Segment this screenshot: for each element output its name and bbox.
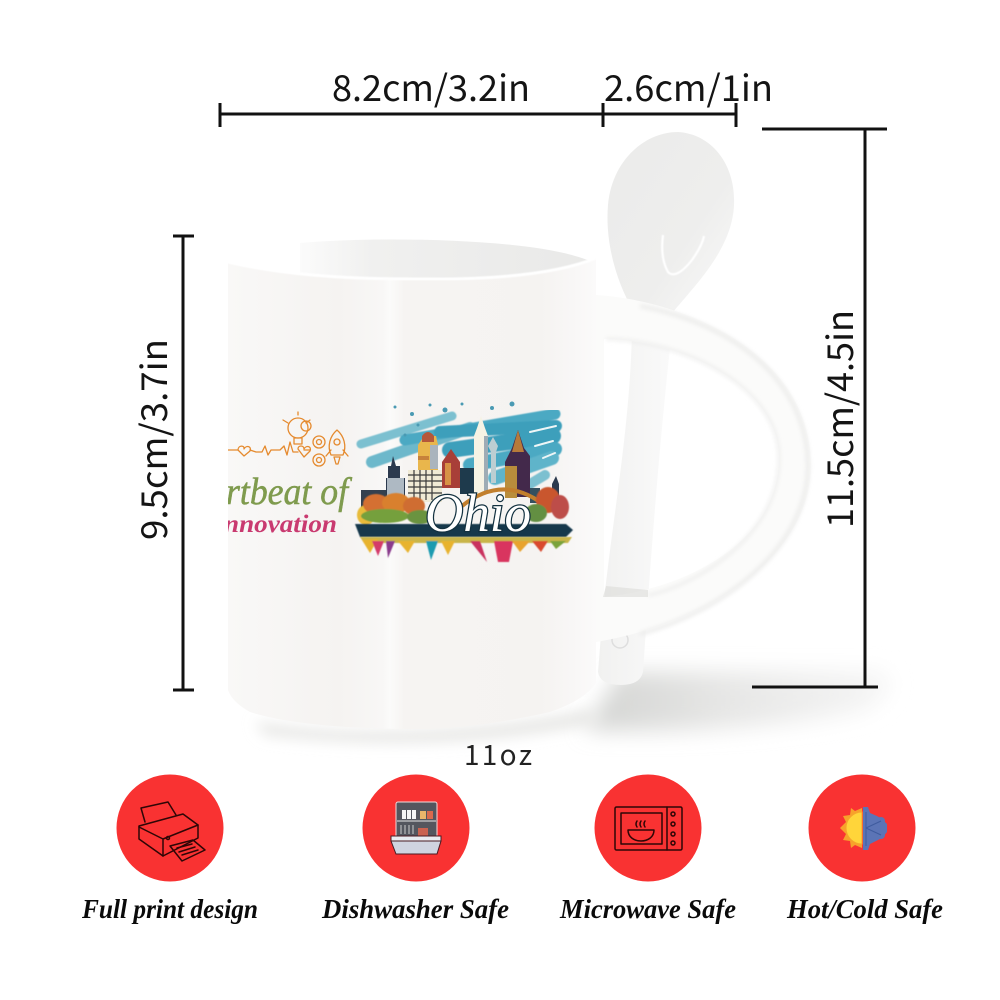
handle outer edge shade: [640, 306, 808, 634]
bridge arch: [462, 489, 548, 508]
handle inner edge shade: [606, 339, 779, 595]
capacity label: 11oz: [464, 734, 532, 774]
spoon highlight: [662, 235, 704, 274]
rim highlight: [228, 258, 596, 279]
dimension: handle width: 2.6cm/1in: [604, 60, 773, 112]
label: Full print design: [81, 894, 258, 924]
dimension: mug width: [220, 60, 603, 127]
feature: hot and cold: [786, 774, 943, 924]
feature: microwave: [559, 774, 736, 924]
dimension: total height: 11.5cm/4.5in: [812, 310, 864, 528]
mug handle: [596, 295, 811, 642]
white paint flecks: [530, 426, 556, 458]
spoon: [598, 132, 734, 685]
label: Microwave Safe: [559, 894, 736, 924]
heartbeat line and icons: [228, 412, 348, 466]
spoon stem: [598, 330, 672, 685]
mug shadow: [255, 672, 889, 743]
icon: printer: [139, 802, 205, 861]
label: Dishwasher Safe: [321, 894, 509, 924]
handle band: [596, 295, 811, 642]
feature: full print: [81, 774, 258, 924]
spoon hole: [612, 632, 628, 648]
Ohio lettering: Ohio: [425, 483, 531, 543]
red circle: [594, 774, 702, 882]
icon: microwave: [615, 807, 682, 850]
splatter: [394, 402, 514, 436]
red circle: [362, 774, 470, 882]
slogan line 2: nnovation: [224, 511, 337, 538]
red circle: [116, 774, 224, 882]
trees: [357, 487, 569, 525]
spoon bowl: [607, 132, 734, 318]
dimension: mug height: 9.5cm/3.7in: [126, 339, 178, 540]
label: Hot/Cold Safe: [786, 894, 943, 924]
buildings: [361, 416, 559, 512]
mug wall: [228, 258, 596, 729]
water band: [355, 524, 573, 537]
mug body: [228, 239, 596, 729]
spoon behind-handle shade: [603, 586, 648, 597]
print: Ohio skyline: [355, 402, 573, 562]
dimension: mug width: 8.2cm/3.2in: [332, 60, 530, 112]
feature: dishwasher: [321, 774, 509, 924]
print: heartbeat slogan: [224, 412, 352, 538]
icon: dishwasher: [391, 802, 441, 854]
slogan line 1: rtbeat of: [226, 471, 352, 513]
icon: sun and snowflake: [840, 807, 887, 850]
colour drips: [360, 537, 572, 562]
dimension: mug height: [126, 236, 194, 690]
red circle: [808, 774, 916, 882]
mug inner wall: [300, 239, 592, 285]
blue paint strokes: [361, 414, 556, 490]
dimension: total height: [752, 129, 887, 688]
